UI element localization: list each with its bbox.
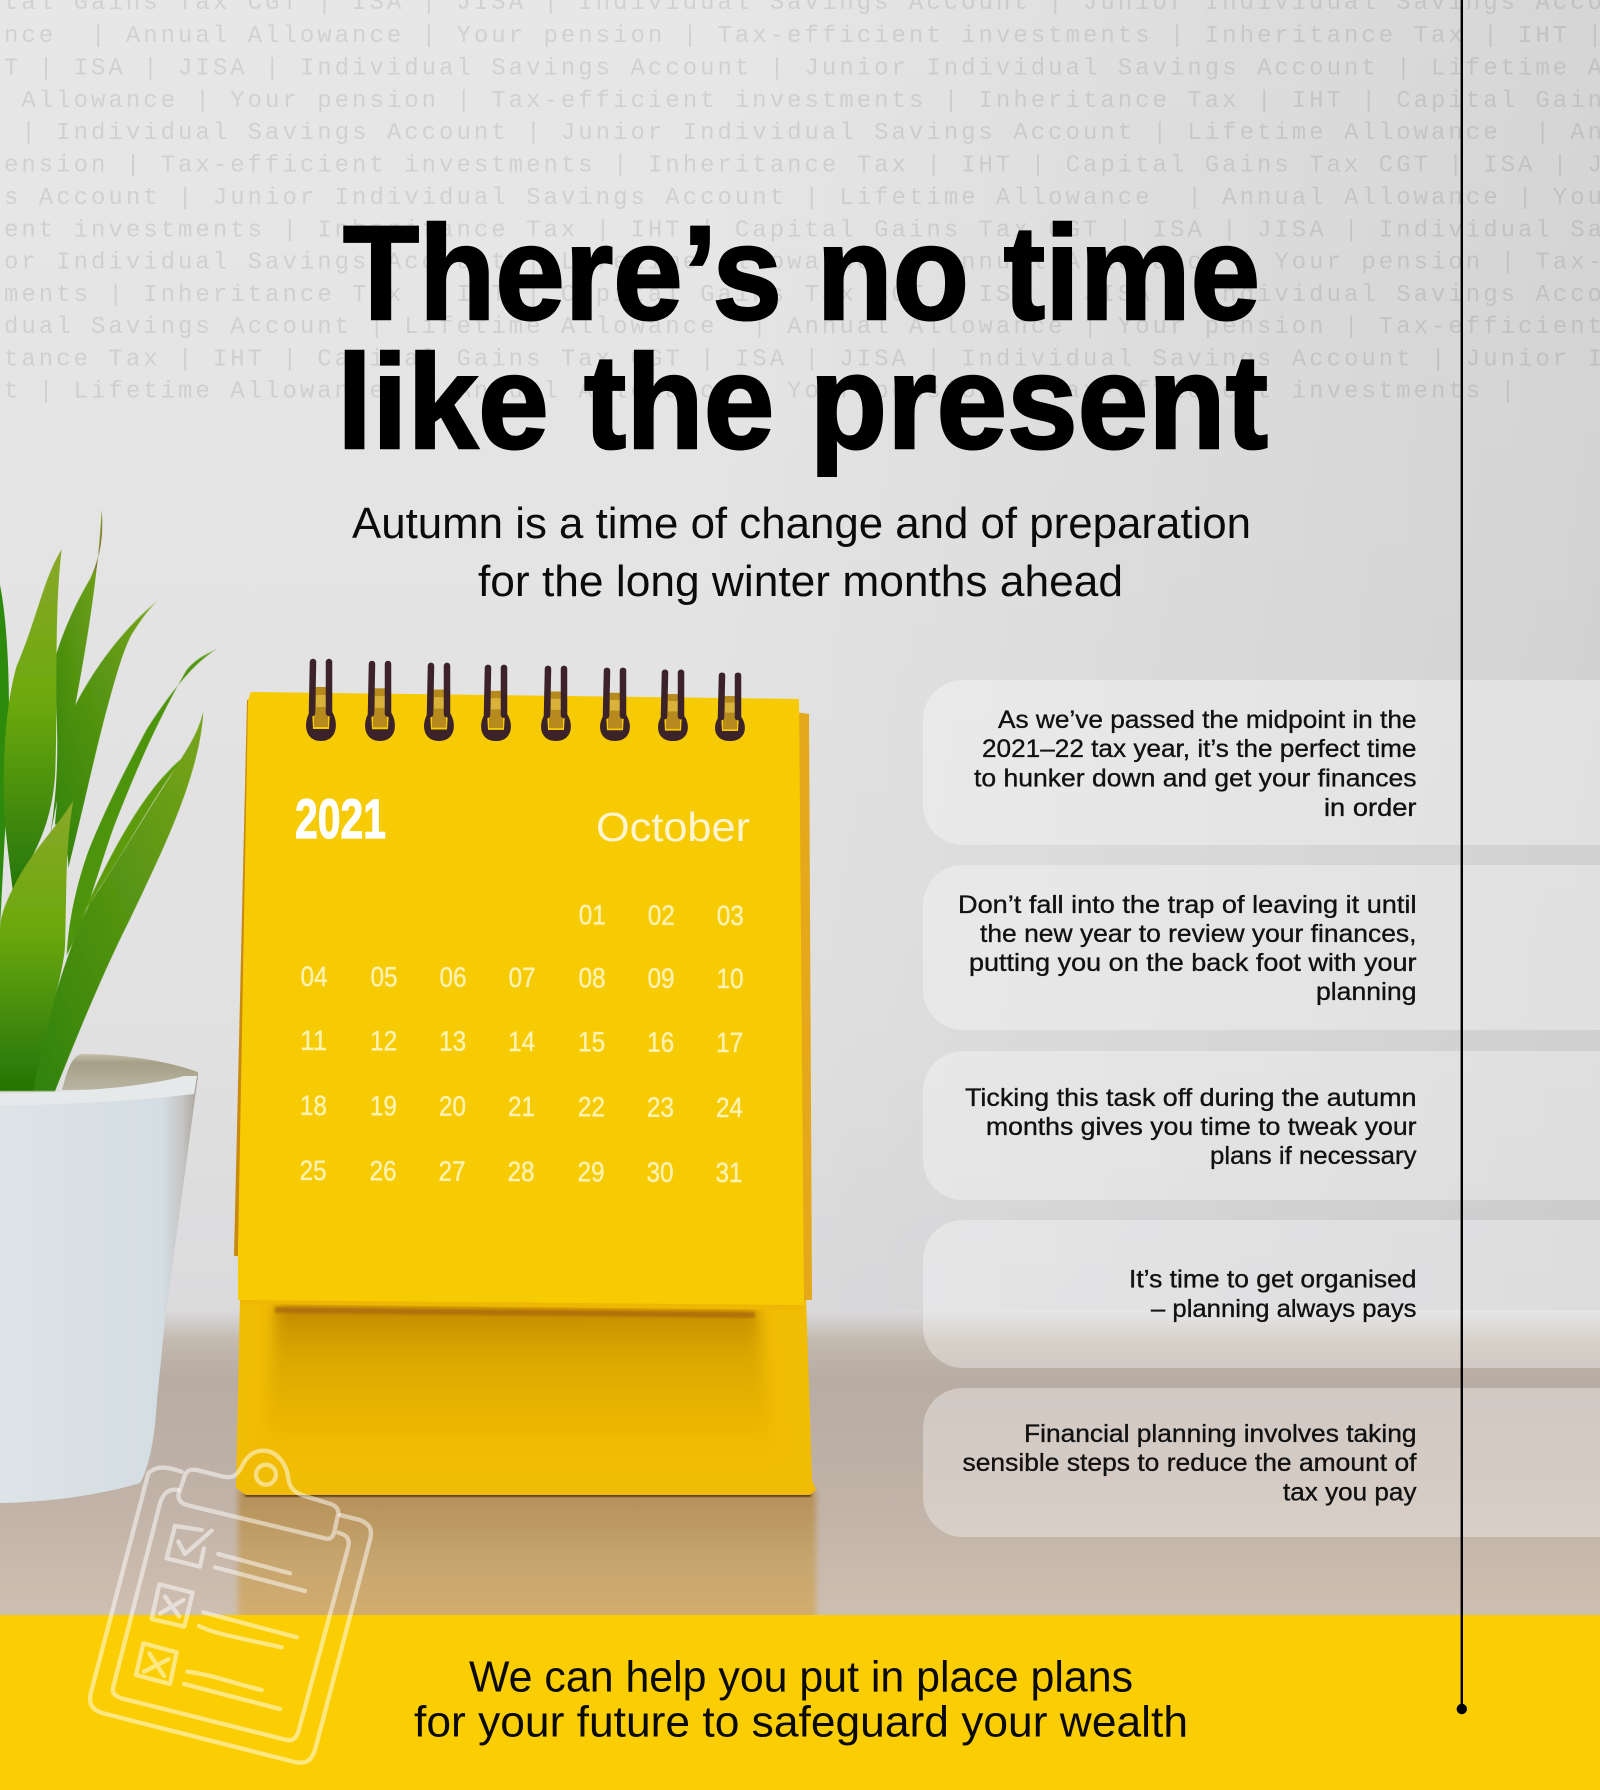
calendar dates: 18 <box>300 1090 327 1121</box>
plant leaves <box>0 510 218 1091</box>
watermark tax terms text pattern: ension | Tax-efficient investments | Inheritance Tax | IHT | Capital Gains Tax CGT | ISA | J <box>4 152 1600 180</box>
calendar dates <box>299 898 744 1188</box>
calendar dates: 05 <box>370 961 398 992</box>
plant pot <box>0 1054 198 1503</box>
calendar dates: 15 <box>578 1026 605 1057</box>
calendar dates: 26 <box>369 1155 397 1186</box>
calendar dates: 06 <box>439 962 467 993</box>
panel: new year trap message: Don’t fall into the trap of leaving it until <box>958 891 1416 919</box>
panel: autumn task message: months gives you time to tweak your <box>986 1113 1416 1141</box>
calendar spiral binding <box>306 662 745 741</box>
calendar dates: 20 <box>439 1091 466 1122</box>
calendar dates: 13 <box>439 1026 466 1057</box>
watermark tax terms text pattern: tance Tax | IHT | Capital Gains Tax CGT | ISA | JISA | Individual Savings Account | Junior I <box>4 346 1600 374</box>
watermark tax terms text pattern <box>4 0 1600 406</box>
panel: new year trap message: the new year to review your finances, <box>980 920 1416 948</box>
calendar dates: 22 <box>578 1091 605 1122</box>
calendar dates: 28 <box>507 1156 535 1187</box>
panel: financial planning message: sensible steps to reduce the amount of <box>962 1449 1417 1477</box>
panel: financial planning message <box>923 1388 1600 1537</box>
calendar back page edge <box>795 712 812 1300</box>
panel: midpoint message: As we’ve passed the midpoint in the <box>998 706 1416 734</box>
panel: midpoint message: in order <box>1324 794 1416 822</box>
subtitle <box>352 499 1251 606</box>
subtitle: for the long winter months ahead <box>478 557 1123 606</box>
calendar dates: 27 <box>438 1156 466 1187</box>
watermark tax terms text pattern: T | ISA | JISA | Individual Savings Account | Junior Individual Savings Account | Lifetime A <box>4 56 1600 82</box>
timeline line with end dot <box>1457 0 1467 1714</box>
panel: autumn task message: plans if necessary <box>1210 1142 1417 1170</box>
title <box>337 199 1268 477</box>
panel: new year trap message <box>923 865 1600 1030</box>
calendar dates: 30 <box>646 1157 674 1188</box>
calendar month: October <box>596 804 750 850</box>
watermark tax terms text pattern: nce | Annual Allowance | Your pension | Tax-efficient investments | Inheritance Tax | IHT | <box>4 23 1600 50</box>
calendar dates: 17 <box>716 1027 743 1058</box>
watermark tax terms text pattern: ments | Inheritance Tax | IHT | Capital Gains Tax CGT | ISA | JISA | Individual Savings Acco <box>4 282 1600 309</box>
calendar base stand <box>236 1296 816 1497</box>
calendar dates: 04 <box>300 961 328 992</box>
subtitle: Autumn is a time of change and of preparation <box>352 499 1251 548</box>
calendar dates: 02 <box>648 900 675 931</box>
watermark tax terms text pattern: ent investments | Inheritance Tax | IHT | Capital Gains Tax CGT | ISA | JISA | Individual Sa <box>4 218 1600 244</box>
watermark tax terms text pattern: or Individual Savings Account | Lifetime Allowance | Annual Allowance | Your pension | Tax- <box>4 250 1600 276</box>
footer call to action: for your future to safeguard your wealth <box>414 1698 1188 1746</box>
watermark tax terms text pattern: Allowance | Your pension | Tax-efficient investments | Inheritance Tax | IHT | Capital Gain <box>4 88 1600 115</box>
watermark tax terms text pattern: | Individual Savings Account | Junior Individual Savings Account | Lifetime Allowance | An <box>4 120 1600 147</box>
panel: get organised message: It’s time to get organised <box>1129 1266 1416 1294</box>
calendar front page <box>238 692 804 1305</box>
calendar dates: 19 <box>370 1090 397 1121</box>
calendar dates: 08 <box>578 962 606 993</box>
yellow footer band <box>0 1615 1600 1790</box>
calendar dates: 23 <box>647 1092 674 1123</box>
calendar dates: 12 <box>370 1025 397 1056</box>
panel: autumn task message <box>923 1051 1600 1200</box>
calendar dates: 03 <box>717 900 744 931</box>
footer call to action <box>414 1652 1188 1746</box>
calendar dates: 07 <box>508 962 536 993</box>
watermark tax terms text pattern: t | Lifetime Allowance | Annual Allowance | Your pension | Tax-efficient investments | <box>4 378 1518 406</box>
watermark tax terms text pattern: dual Savings Account | Lifetime Allowance | Annual Allowance | Your pension | Tax-efficient <box>4 314 1600 341</box>
calendar dates: 29 <box>577 1156 605 1187</box>
icon: clipboard checklist <box>90 1451 371 1763</box>
calendar dates: 01 <box>579 899 606 930</box>
watermark tax terms text pattern: s Account | Junior Individual Savings Account | Lifetime Allowance | Annual Allowance | You <box>4 185 1600 212</box>
calendar dates: 16 <box>647 1027 674 1058</box>
calendar dates: 10 <box>716 963 744 994</box>
calendar spine sliver <box>234 700 250 1256</box>
calendar <box>234 662 816 1497</box>
panel: autumn task message: Ticking this task off during the autumn <box>965 1084 1416 1112</box>
calendar dates: 31 <box>715 1157 743 1188</box>
panel: midpoint message: to hunker down and get your finances <box>974 764 1416 792</box>
panel: financial planning message: tax you pay <box>1283 1478 1417 1506</box>
panel: midpoint message: 2021–22 tax year, it’s the perfect time <box>982 735 1416 763</box>
panel: new year trap message: putting you on the back foot with your <box>969 949 1416 977</box>
panel: financial planning message: Financial planning involves taking <box>1024 1420 1416 1448</box>
calendar dates: 11 <box>300 1025 327 1056</box>
calendar year: 2021 <box>295 787 386 850</box>
calendar dates: 25 <box>299 1155 327 1186</box>
footer call to action: We can help you put in place plans <box>469 1652 1133 1702</box>
panel: get organised message: – planning always pays <box>1151 1295 1416 1323</box>
panel: get organised message <box>923 1220 1600 1368</box>
panel: new year trap message: planning <box>1316 978 1416 1006</box>
calendar dates: 14 <box>508 1026 535 1057</box>
calendar dates: 09 <box>647 963 675 994</box>
title: like the present <box>337 328 1268 477</box>
title: There’s no time <box>343 199 1260 348</box>
panel: midpoint message <box>923 680 1600 845</box>
calendar dates: 24 <box>716 1092 743 1123</box>
calendar dates: 21 <box>508 1091 535 1122</box>
